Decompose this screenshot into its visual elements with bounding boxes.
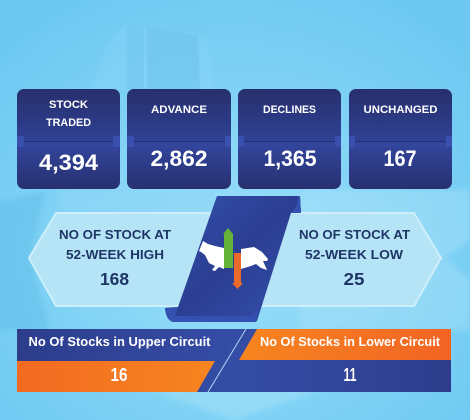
icon: green up arrow [223,228,233,268]
text: 52-week low heading: 52-WEEK LOW [305,247,404,262]
panel: declines [238,89,341,189]
text: 52-week high heading [59,227,171,262]
icon: orange down arrow [232,253,243,289]
band: upper circuit value [17,361,215,392]
label: stock traded: STOCK [49,99,89,111]
value: advance: 2,862 [150,146,208,171]
value: upper circuit: 16 [110,365,128,385]
icon: bull [199,241,224,271]
banner scroll with bull and bear icon [165,196,301,322]
panel: stock traded [17,89,120,189]
label: stock traded: TRADED [46,117,91,129]
label: advance: ADVANCE [151,104,207,116]
label: stock traded [46,99,91,129]
panel: advance [127,89,231,189]
label: unchanged: UNCHANGED [364,104,438,116]
panel: upper and lower circuit [17,329,451,392]
panel: unchanged [349,89,452,189]
text: upper circuit heading: No Of Stocks in Upper Circuit [28,335,211,349]
value: 52-week low: 25 [344,269,365,289]
value: declines: 1,365 [264,146,316,171]
text: 52-week high heading: 52-WEEK HIGH [66,247,164,262]
panel: 52-week low [260,213,441,306]
value: stock traded: 4,394 [39,150,99,175]
text: 52-week high heading: NO OF STOCK AT [59,227,171,242]
text: lower circuit heading: No Of Stocks in Lower Circuit [260,335,441,349]
value: lower circuit: 11 [344,365,356,385]
text: 52-week low heading [299,227,410,262]
panel: 52-week high [29,213,210,306]
label: declines: DECLINES [263,104,316,116]
value: unchanged: 167 [384,146,416,171]
text: 52-week low heading: NO OF STOCK AT [299,227,410,242]
band: lower circuit heading [239,329,451,360]
icon: bear [241,247,268,270]
value: 52-week high: 168 [100,269,129,289]
